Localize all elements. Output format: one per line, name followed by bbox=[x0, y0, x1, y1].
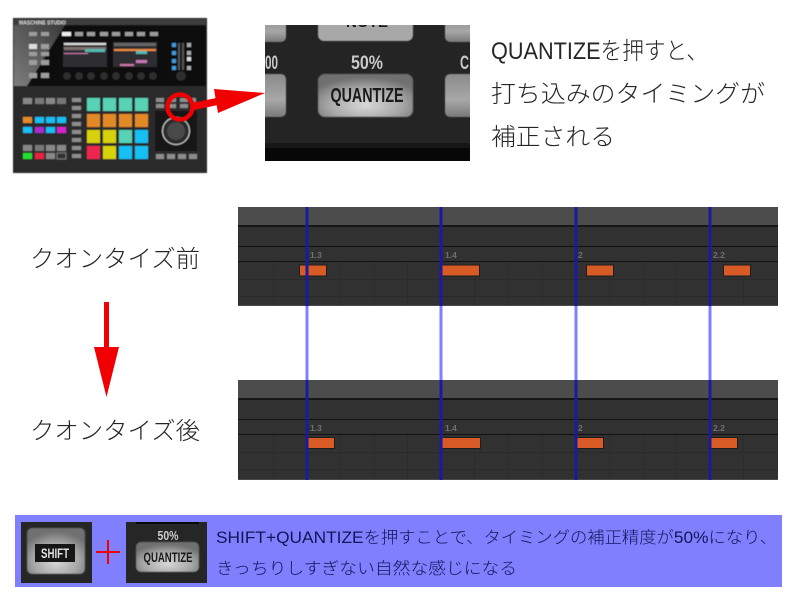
beat labels: 1.4 bbox=[445, 250, 457, 260]
notes after quantize bbox=[308, 438, 738, 448]
down arrow bbox=[94, 302, 119, 397]
knobs bbox=[62, 70, 186, 82]
tip text: きっちりしすぎない自然な感じになる bbox=[216, 559, 517, 578]
screen right bbox=[113, 42, 157, 67]
right controls bbox=[172, 43, 191, 70]
explanation text bbox=[491, 38, 765, 151]
QUANTIZE button image: 50% bbox=[158, 528, 179, 543]
beat labels after: 2 bbox=[578, 423, 583, 433]
explanation text: QUANTIZEを押すと、 bbox=[491, 38, 708, 65]
beat labels: 2.2 bbox=[713, 250, 725, 260]
device photo: MASCHINE STUDIO bbox=[13, 18, 207, 173]
label: before quantize: クオンタイズ前 bbox=[30, 246, 200, 273]
group and transport buttons bbox=[23, 98, 66, 159]
beat labels after bbox=[310, 423, 725, 433]
device photo: MASCHINE STUDIO: MASCHINE STUDIO bbox=[19, 20, 66, 26]
label: 50%: 50% bbox=[351, 53, 383, 74]
plus sign bbox=[96, 540, 120, 564]
QUANTIZE button image: QUANTIZE bbox=[144, 549, 192, 565]
SHIFT button image bbox=[21, 522, 92, 583]
tip panel bbox=[15, 515, 782, 587]
SHIFT button image: SHIFT bbox=[41, 545, 69, 561]
piano roll before quantize bbox=[238, 207, 778, 306]
beat labels bbox=[310, 250, 725, 260]
screen left bbox=[63, 42, 107, 67]
explanation text: 打ち込みのタイミングが bbox=[491, 81, 765, 108]
beat labels: 1.3 bbox=[310, 250, 322, 260]
tip text: SHIFT+QUANTIZEを押すことで、タイミングの補正精度が50%になり、 bbox=[216, 528, 777, 547]
beat labels: 2 bbox=[578, 250, 583, 260]
vertical timing guide lines bbox=[306, 207, 712, 480]
QUANTIZE button bbox=[318, 74, 413, 117]
notes before quantize bbox=[300, 265, 750, 276]
top buttons bbox=[29, 32, 158, 78]
label: after quantize: クオンタイズ後 bbox=[30, 418, 200, 445]
partial label: NOTE: NOTE bbox=[346, 14, 388, 31]
jog wheel bbox=[155, 111, 197, 151]
close-up photo of QUANTIZE button bbox=[265, 25, 470, 161]
partial label: 00: 00 bbox=[265, 53, 278, 74]
explanation text: 補正される bbox=[491, 124, 615, 151]
piano roll after quantize bbox=[238, 380, 778, 480]
pads bbox=[87, 98, 148, 159]
callout arrow with red circle bbox=[168, 89, 265, 120]
QUANTIZE button: QUANTIZE bbox=[330, 85, 404, 107]
side buttons bbox=[72, 98, 197, 159]
beat labels after: 2.2 bbox=[713, 423, 725, 433]
tip text bbox=[216, 528, 777, 578]
QUANTIZE button image bbox=[126, 522, 207, 583]
beat labels after: 1.4 bbox=[445, 423, 457, 433]
partial label: C: C bbox=[460, 53, 469, 74]
beat labels after: 1.3 bbox=[310, 423, 322, 433]
